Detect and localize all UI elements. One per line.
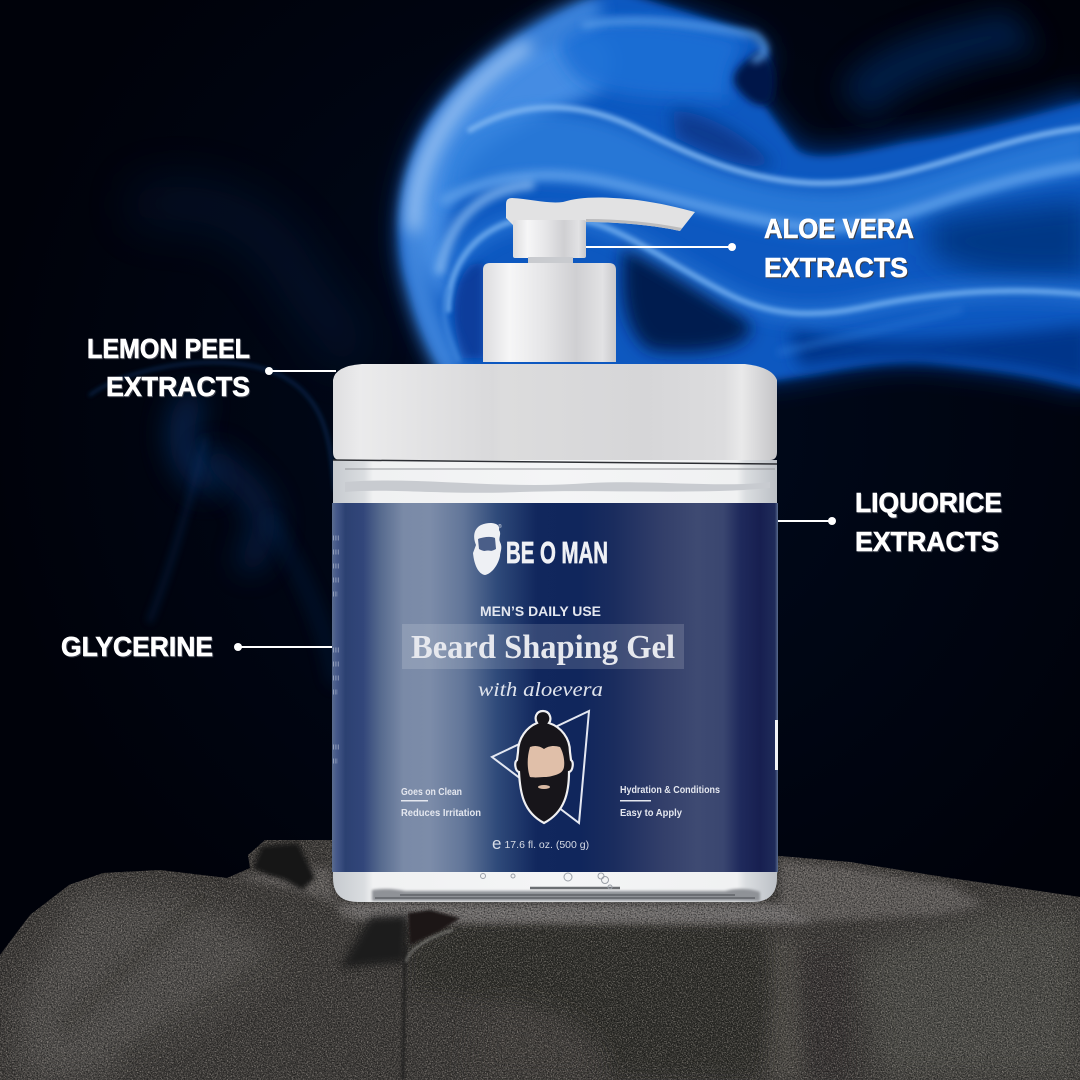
rock shading xyxy=(20,890,290,1080)
label: lemon peel extracts: LEMON PEEL xyxy=(87,333,250,364)
front crack block xyxy=(408,910,460,945)
label background xyxy=(332,503,778,872)
rock noise light xyxy=(0,830,1080,1080)
benefit: hydration: Hydration & Conditions xyxy=(620,784,720,796)
label: liquorice extracts: EXTRACTS xyxy=(855,526,999,557)
logo face cutout xyxy=(478,537,496,551)
rock noise dark xyxy=(0,830,1080,1080)
bottle xyxy=(332,198,778,902)
head outline xyxy=(515,711,573,823)
label: aloe vera extracts: ALOE VERA xyxy=(765,214,915,245)
label: aloe vera extracts: EXTRACTS xyxy=(765,253,909,284)
connector: lemon peel xyxy=(265,367,336,375)
label: lemon peel extracts: EXTRACTS xyxy=(106,371,250,402)
net weight: 17.6 fl. oz. (500 g) xyxy=(504,839,589,851)
script subtitle: with aloevera xyxy=(478,679,603,701)
label: liquorice extracts: EXTRACTS xyxy=(856,527,1000,558)
product subtitle: MEN’S DAILY USE xyxy=(480,603,601,619)
gel jar upper xyxy=(333,460,777,510)
cap seam xyxy=(333,460,777,464)
pump spout shadow edge xyxy=(586,219,682,231)
label: aloe vera extracts: ALOE VERA xyxy=(764,213,914,244)
label: aloe vera extracts: EXTRACTS xyxy=(764,252,908,283)
light strands xyxy=(412,10,1080,365)
mouth xyxy=(538,785,550,789)
logo beard icon xyxy=(473,523,501,575)
label: liquorice extracts xyxy=(855,487,1003,558)
benefit: goes on clean: Goes on Clean xyxy=(401,786,462,798)
dark front face xyxy=(410,918,770,1080)
bubbles xyxy=(480,873,612,889)
pump stem xyxy=(528,257,573,264)
product title: Beard Shaping Gel xyxy=(411,629,675,666)
net weight: e xyxy=(492,834,501,853)
benefits right xyxy=(620,784,720,819)
label: aloe vera extracts xyxy=(764,213,915,284)
label xyxy=(332,503,778,872)
logo registered mark: ® xyxy=(498,523,502,530)
light band middle xyxy=(445,111,1080,234)
dark pockets xyxy=(454,50,1080,385)
connector: glycerine xyxy=(234,643,334,651)
label: glycerine: GLYCERINE xyxy=(61,631,213,662)
label right edge strip xyxy=(775,720,778,770)
crack shadow xyxy=(340,915,408,968)
blue smoke xyxy=(400,0,1080,390)
face illustration xyxy=(515,711,573,823)
rock top surface xyxy=(235,860,985,924)
upper right wisp xyxy=(840,10,1040,120)
benefits left xyxy=(401,786,481,819)
logo mouth xyxy=(482,550,494,556)
crack line xyxy=(403,945,405,1080)
jar base band xyxy=(372,889,760,901)
label: glycerine: GLYCERINE xyxy=(62,632,214,663)
benefit: easy to apply: Easy to Apply xyxy=(620,807,682,819)
triangle xyxy=(492,711,589,823)
rock xyxy=(0,830,1080,1080)
light lobe left xyxy=(411,33,612,305)
label: lemon peel extracts: EXTRACTS xyxy=(107,372,251,403)
title band xyxy=(402,624,684,669)
smoke body xyxy=(400,0,1080,390)
smoke halo xyxy=(400,0,1080,390)
connector: liquorice xyxy=(778,517,836,525)
jar base xyxy=(333,870,777,902)
crack highlight xyxy=(406,930,453,962)
label left fine print xyxy=(333,538,340,761)
cap xyxy=(333,364,777,460)
label: liquorice extracts: LIQUORICE xyxy=(855,487,1002,518)
label: liquorice extracts: LIQUORICE xyxy=(856,488,1003,519)
pump collar xyxy=(513,220,586,258)
logo wordmark: BE O MAN xyxy=(506,535,608,570)
benefit: reduces irritation: Reduces Irritation xyxy=(401,807,481,819)
pump neck xyxy=(483,263,616,362)
label: lemon peel extracts xyxy=(87,333,251,403)
connector: aloe vera xyxy=(586,243,736,251)
faint smoke left xyxy=(90,202,345,680)
label: lemon peel extracts: LEMON PEEL xyxy=(88,334,251,365)
pump spout xyxy=(506,198,695,231)
brand logo xyxy=(473,523,608,575)
light band top xyxy=(559,21,745,100)
rock body xyxy=(0,840,1080,1080)
rock crevice xyxy=(253,843,315,890)
face skin xyxy=(528,746,564,777)
